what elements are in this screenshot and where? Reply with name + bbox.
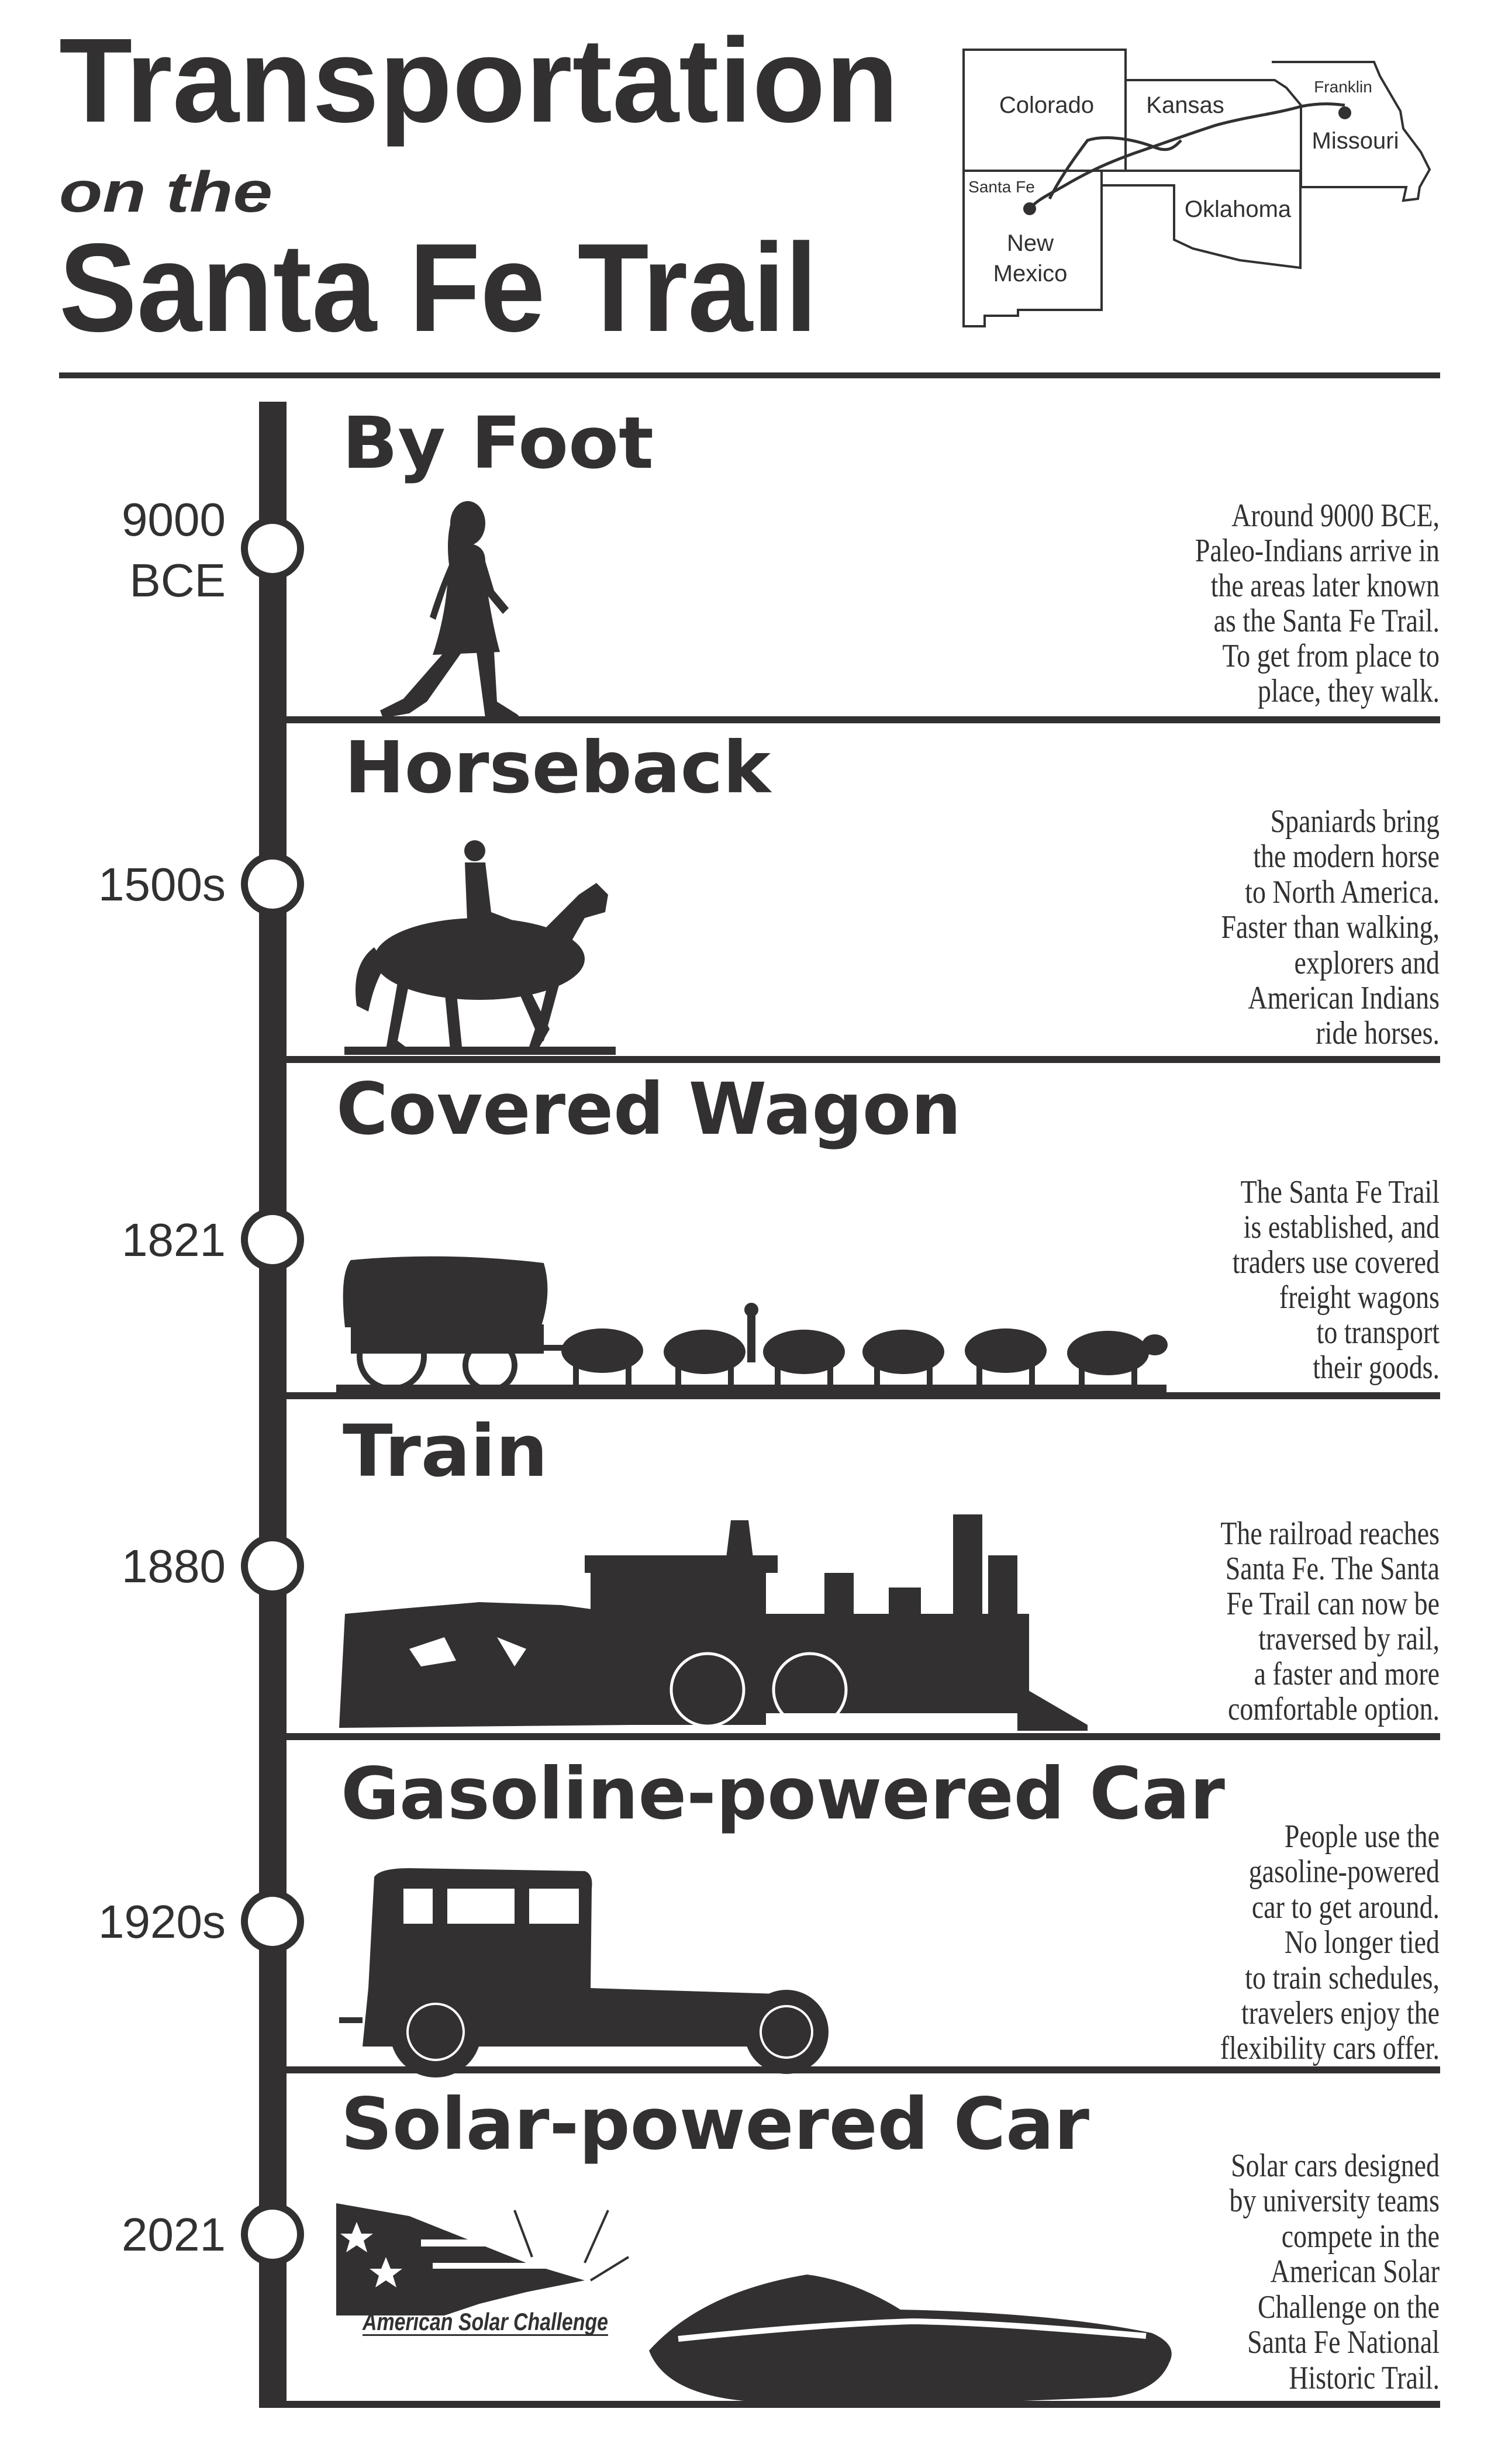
body texts: to North America. — [1245, 874, 1440, 910]
headings: Train — [343, 1410, 548, 1493]
body texts: Fe Trail can now be — [1226, 1586, 1440, 1622]
icon: American Solar Challenge logo — [336, 2203, 629, 2336]
map of trail: Franklin — [1314, 78, 1372, 96]
body texts: gasoline-powered — [1249, 1854, 1440, 1890]
headings: Solar-powered Car — [341, 2083, 1089, 2166]
body texts: People use the — [1285, 1818, 1440, 1855]
body texts: to train schedules, — [1245, 1960, 1440, 1996]
year labels: BCE — [130, 554, 226, 606]
body texts: as the Santa Fe Trail. — [1214, 603, 1440, 639]
body texts: Spaniards bring — [1271, 803, 1440, 840]
body texts: the modern horse — [1253, 838, 1440, 875]
body texts: American Solar — [1271, 2254, 1440, 2290]
body texts: traversed by rail, — [1258, 1621, 1440, 1657]
body texts: The Santa Fe Trail — [1241, 1174, 1440, 1210]
body texts: Santa Fe National — [1247, 2324, 1440, 2361]
body texts: their goods. — [1313, 1350, 1440, 1386]
icon: walking woman — [380, 501, 520, 718]
body texts: explorers and — [1294, 945, 1440, 981]
year labels — [98, 494, 226, 2261]
title: on the — [59, 160, 272, 224]
title — [59, 13, 899, 358]
map of trail: Oklahoma — [1185, 196, 1292, 222]
body texts: No longer tied — [1285, 1924, 1440, 1961]
body texts: compete in the — [1282, 2218, 1440, 2255]
title: Transportation — [59, 13, 899, 147]
map of trail: New — [1007, 230, 1054, 256]
year labels: 1821 — [122, 1214, 226, 1266]
body texts: Faster than walking, — [1221, 909, 1440, 945]
icon: solar car — [649, 2275, 1172, 2402]
title: Santa Fe Trail — [59, 217, 817, 358]
map of trail: Santa Fe — [968, 178, 1035, 196]
headings — [336, 402, 1225, 2166]
body texts: flexibility cars offer. — [1220, 2030, 1440, 2066]
body texts: The railroad reaches — [1220, 1516, 1440, 1552]
icon: vintage car — [339, 1868, 829, 2078]
map of trail: Missouri — [1312, 128, 1399, 154]
body texts: Santa Fe. The Santa — [1226, 1551, 1440, 1587]
timeline — [244, 402, 1440, 2408]
body texts: American Indians — [1248, 980, 1440, 1016]
year labels: 1880 — [122, 1540, 226, 1592]
headings: By Foot — [342, 402, 654, 485]
year labels: 9000 — [122, 494, 226, 546]
year labels: 1920s — [98, 1896, 226, 1948]
map of trail: Kansas — [1146, 92, 1224, 118]
body texts: Challenge on the — [1258, 2289, 1440, 2325]
body texts: Historic Trail. — [1289, 2360, 1440, 2396]
map of trail — [964, 50, 1430, 326]
body texts: car to get around. — [1252, 1889, 1440, 1925]
map of trail: Colorado — [999, 92, 1094, 118]
divider — [59, 372, 1440, 378]
body texts: traders use covered — [1233, 1244, 1440, 1281]
body texts: ride horses. — [1316, 1015, 1440, 1051]
body texts: To get from place to — [1222, 638, 1440, 674]
body texts: is established, and — [1244, 1209, 1440, 1245]
icon: covered wagon and oxen — [336, 1257, 1168, 1392]
headings: Covered Wagon — [336, 1068, 961, 1151]
icon: horse and rider — [344, 840, 616, 1055]
body texts: to transport — [1317, 1314, 1440, 1351]
body texts: Solar cars designed — [1231, 2148, 1440, 2184]
headings: Horseback — [344, 726, 772, 809]
body texts: place, they walk. — [1258, 673, 1440, 709]
body texts: a faster and more — [1254, 1656, 1440, 1692]
icon: steam train — [339, 1514, 1088, 1731]
body texts: Around 9000 BCE, — [1231, 498, 1440, 534]
year labels: 1500s — [98, 858, 226, 910]
body texts: comfortable option. — [1228, 1691, 1440, 1727]
body texts: by university teams — [1229, 2183, 1440, 2219]
year labels: 2021 — [122, 2208, 226, 2261]
icon: American Solar Challenge logo: American Solar Challenge — [362, 2308, 608, 2335]
body texts: Paleo-Indians arrive in — [1195, 533, 1440, 569]
body texts — [1195, 498, 1440, 2396]
body texts: travelers enjoy the — [1241, 1995, 1440, 2031]
map of trail: Mexico — [993, 261, 1067, 287]
body texts: the areas later known — [1211, 568, 1440, 604]
body texts: freight wagons — [1279, 1279, 1440, 1316]
headings: Gasoline-powered Car — [341, 1752, 1225, 1835]
